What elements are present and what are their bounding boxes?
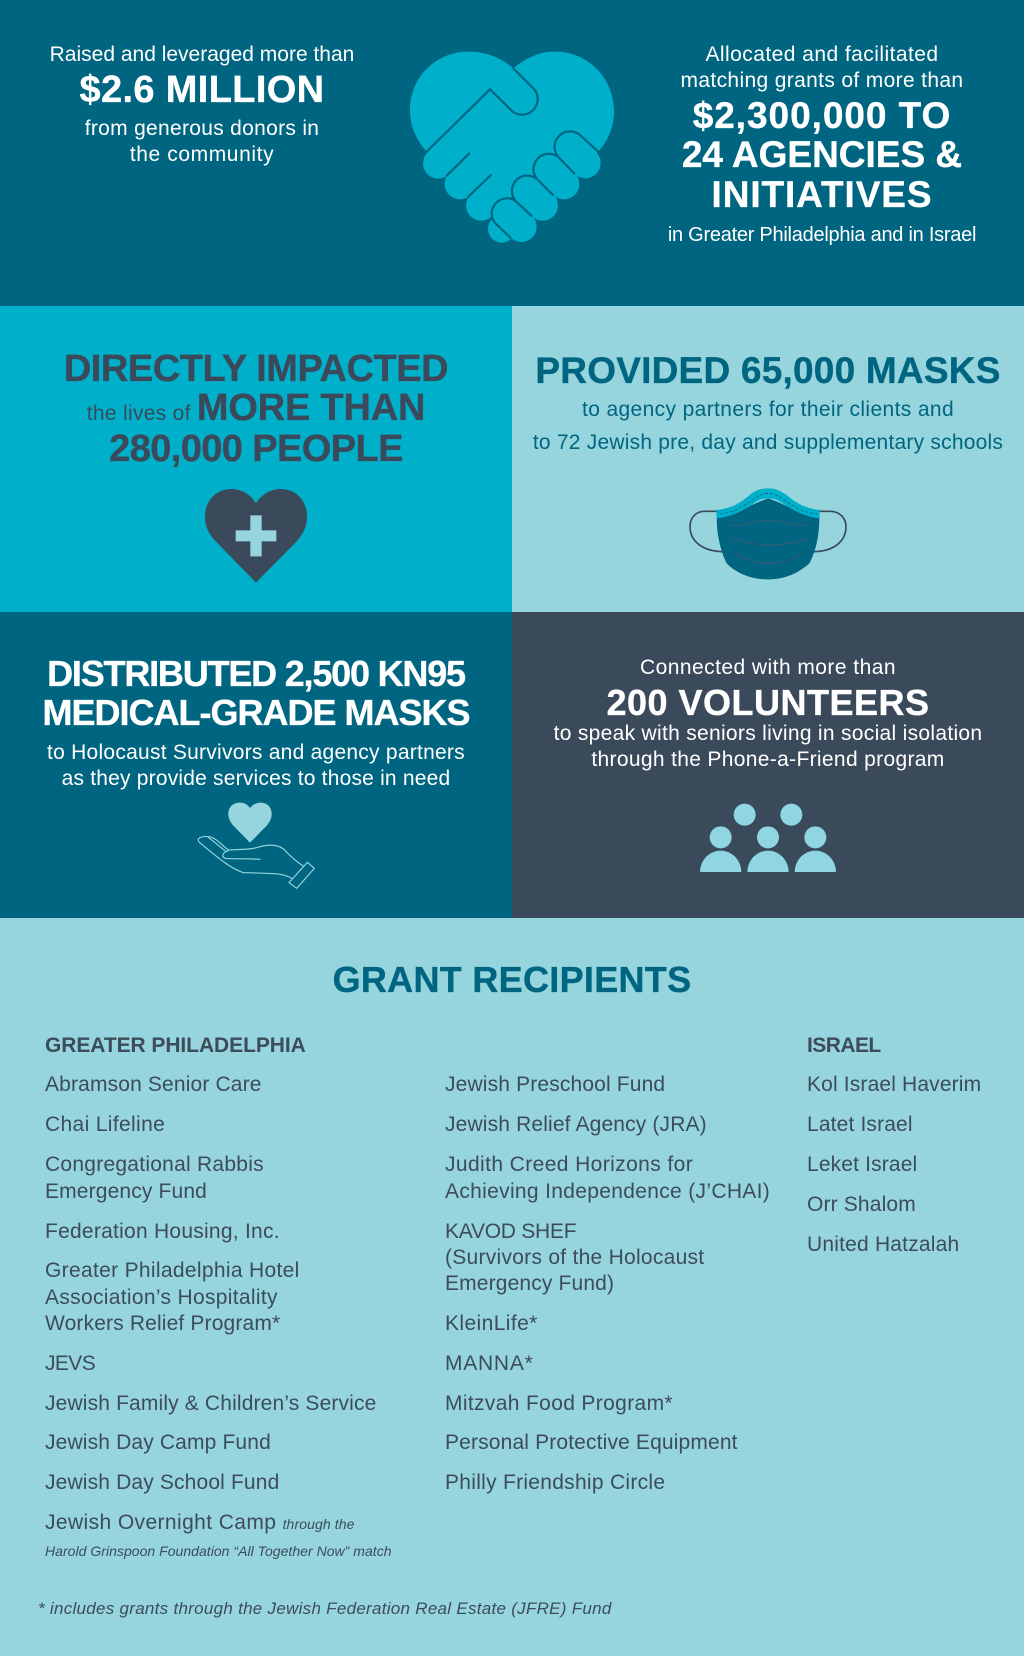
panel: provided masks xyxy=(512,306,1024,612)
list: Greater Philadelphia: Jewish Day Camp Fund xyxy=(45,1431,271,1454)
list: Greater Philadelphia: Greater Philadelphia Hotel xyxy=(45,1259,300,1282)
list: Israel: United Hatzalah xyxy=(807,1233,959,1256)
list: Greater Philadelphia continued: KleinLife* xyxy=(445,1312,538,1335)
list: Greater Philadelphia continued: Jewish Preschool Fund xyxy=(445,1073,665,1096)
list: Greater Philadelphia continued: KAVOD SHEF xyxy=(445,1220,576,1243)
list: Greater Philadelphia: Congregational Rabbis xyxy=(45,1153,264,1176)
text: matching grants: $2,300,000 TO xyxy=(693,95,951,136)
list: Greater Philadelphia: Jewish Overnight Camp through the xyxy=(45,1511,354,1534)
list: Greater Philadelphia: Harold Grinspoon Foundation “All Together Now” match xyxy=(45,1543,392,1559)
list: Greater Philadelphia: JEVS xyxy=(45,1352,95,1375)
list: Greater Philadelphia: Chai Lifeline xyxy=(45,1113,165,1136)
text: matching grants: Allocated and facilitated xyxy=(705,43,939,66)
list: Greater Philadelphia continued: Judith Creed Horizons for xyxy=(445,1153,693,1176)
text: KN95 recipients xyxy=(47,741,465,790)
list heading: Greater Philadelphia: GREATER PHILADELPHIA xyxy=(45,1034,306,1057)
list: Greater Philadelphia: Federation Housing, Inc. xyxy=(45,1220,280,1243)
panel: funds raised and matching grants xyxy=(0,0,1024,306)
list: Israel: Leket Israel xyxy=(807,1153,917,1176)
icon: hand holding heart xyxy=(198,802,315,889)
heading: directly impacted xyxy=(64,348,448,470)
list: Greater Philadelphia continued: Personal Protective Equipment xyxy=(445,1431,738,1454)
list: Greater Philadelphia continued xyxy=(445,1073,770,1494)
text: connected: Connected with more than xyxy=(640,656,896,679)
text: mask recipients: to 72 Jewish pre, day and supplementary schools xyxy=(533,431,1003,454)
list: Israel xyxy=(807,1034,981,1256)
text: matching grants: INITIATIVES xyxy=(712,174,932,215)
footnote: * includes grants through the Jewish Federation Real Estate (JFRE) Fund xyxy=(38,1599,612,1618)
icon: heart with plus xyxy=(205,489,307,582)
heading: grant recipients: GRANT RECIPIENTS xyxy=(333,959,691,1000)
list: Greater Philadelphia continued: MANNA* xyxy=(445,1352,534,1375)
list: Greater Philadelphia: Emergency Fund xyxy=(45,1180,207,1203)
list: Israel: Latet Israel xyxy=(807,1113,913,1136)
text: funds raised: $2.6 MILLION xyxy=(80,69,324,111)
text: matching grants xyxy=(668,43,976,246)
list: Greater Philadelphia: Abramson Senior Care xyxy=(45,1073,262,1096)
text: phone-a-friend: through the Phone-a-Friend program xyxy=(591,748,945,771)
text: matching grants: 24 AGENCIES & xyxy=(682,134,962,175)
list: Greater Philadelphia: Jewish Family & Children’s Service xyxy=(45,1392,376,1415)
list: Greater Philadelphia continued: Achieving Independence (J’CHAI) xyxy=(445,1180,770,1203)
heading: 65,000 masks: PROVIDED 65,000 MASKS xyxy=(535,350,1001,391)
text: KN95 recipients: as they provide services to those in need xyxy=(62,767,450,790)
list: Greater Philadelphia continued: (Survivors of the Holocaust xyxy=(445,1246,704,1269)
heading: directly impacted: 280,000 PEOPLE xyxy=(109,428,403,470)
list: Greater Philadelphia continued: Jewish Relief Agency (JRA) xyxy=(445,1113,707,1136)
icon: group of people xyxy=(700,804,836,872)
text: funds raised: from generous donors in xyxy=(85,117,319,140)
text: funds raised: the community xyxy=(130,143,274,166)
heading: KN95 masks xyxy=(42,653,470,733)
list: Greater Philadelphia: Association’s Hospitality xyxy=(45,1286,278,1309)
list: Greater Philadelphia: Workers Relief Program* xyxy=(45,1312,280,1335)
text: funds raised: Raised and leveraged more than xyxy=(50,43,354,66)
text: matching grants: in Greater Philadelphia and in Israel xyxy=(668,224,976,246)
text: mask recipients: to agency partners for their clients and xyxy=(582,398,954,421)
text: funds raised xyxy=(50,43,354,166)
panel: KN95 masks xyxy=(0,612,512,918)
icon: face mask xyxy=(689,488,847,580)
list: Israel: Orr Shalom xyxy=(807,1193,916,1216)
text: mask recipients xyxy=(533,398,1003,454)
text: matching grants: matching grants of more than xyxy=(681,69,963,92)
list: Greater Philadelphia continued: Mitzvah Food Program* xyxy=(445,1392,673,1415)
text: KN95 recipients: to Holocaust Survivors and agency partners xyxy=(47,741,465,764)
list: Greater Philadelphia continued: Emergency Fund) xyxy=(445,1272,614,1295)
heading: 200 volunteers: 200 VOLUNTEERS xyxy=(606,682,930,723)
icon: handshake heart xyxy=(410,52,614,243)
list: Greater Philadelphia xyxy=(45,1034,392,1559)
list heading: Israel: ISRAEL xyxy=(807,1034,881,1057)
panel: directly impacted xyxy=(0,306,512,612)
list: Israel: Kol Israel Haverim xyxy=(807,1073,981,1096)
heading: KN95 masks: DISTRIBUTED 2,500 KN95 xyxy=(47,653,465,694)
panel: volunteers xyxy=(512,612,1024,918)
text: phone-a-friend xyxy=(554,722,982,771)
heading: directly impacted: the lives of MORE THAN xyxy=(87,387,425,429)
panel: grant recipients: Philly Friendship Circle xyxy=(445,1471,665,1494)
heading: directly impacted: DIRECTLY IMPACTED xyxy=(64,348,448,390)
heading: KN95 masks: MEDICAL-GRADE MASKS xyxy=(42,692,470,733)
panel: grant recipients xyxy=(0,918,1024,1656)
list: Greater Philadelphia: Jewish Day School Fund xyxy=(45,1471,279,1494)
text: phone-a-friend: to speak with seniors living in social isolation xyxy=(554,722,982,745)
